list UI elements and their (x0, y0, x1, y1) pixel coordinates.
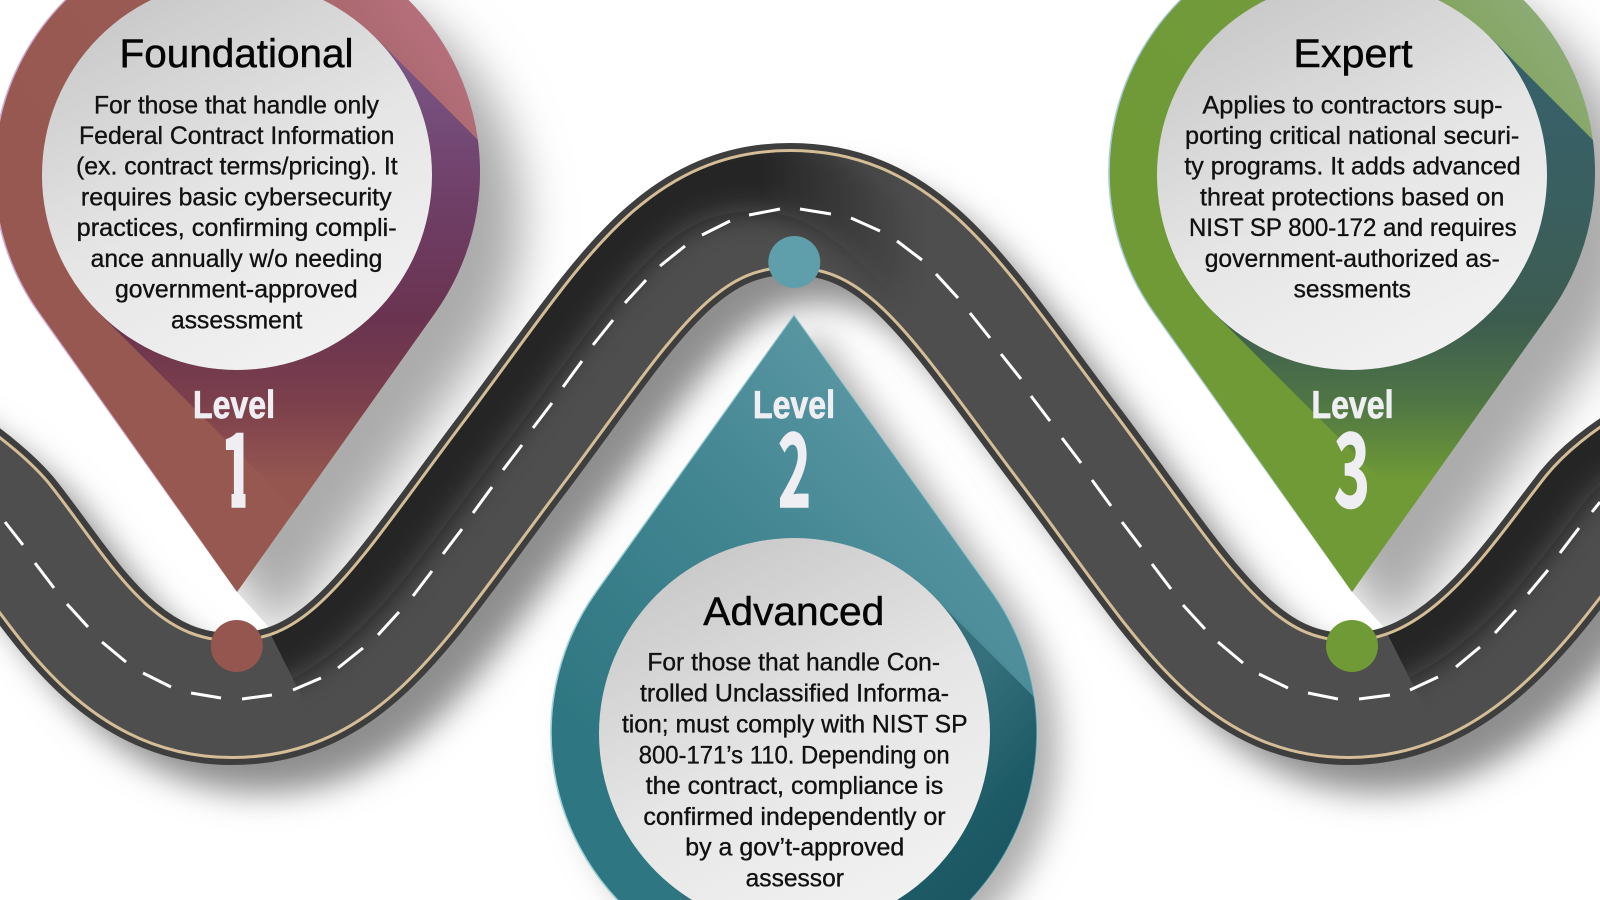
text block: level 1 description (76, 91, 398, 334)
road marker: level 2 (768, 236, 820, 288)
panel: level 3 pin (1109, 0, 1600, 638)
text block: level 3 description (1184, 91, 1521, 304)
pin 3 drop shadow (1352, 0, 1600, 627)
text block: level 3 description: threat protections based on (1200, 184, 1504, 212)
label: Level 3: 3 (1334, 390, 1370, 537)
text block: level 3 description: government-authorized as- (1205, 245, 1500, 273)
heading: Foundational: Foundational (120, 32, 354, 76)
label: Level 1: 1 (220, 390, 255, 537)
panel: level 1 pin (0, 0, 480, 592)
text block: level 2 description (622, 649, 968, 893)
text block: level 1 description: ance annually w/o needing (91, 245, 382, 273)
text block: level 1 description: For those that handle only (94, 91, 379, 119)
text block: level 1 description: practices, confirming compli- (77, 214, 397, 242)
text block: level 1 description: government-approved (115, 276, 358, 304)
text block: level 3 description: Applies to contractors sup- (1202, 91, 1503, 119)
text block: level 2 description: confirmed independently or (643, 803, 946, 831)
text block: level 2 description: tion; must comply with NIST SP (622, 710, 968, 738)
text block: level 3 description: ty programs. It adds advanced (1184, 153, 1521, 181)
pin 2 drop shadow (573, 329, 1059, 900)
label: Level 2: 2 (778, 390, 811, 537)
label: Level 3 (1312, 384, 1394, 537)
text block: level 3 description: porting critical national securi- (1185, 122, 1519, 150)
label: Level 3: Level (1312, 384, 1394, 427)
road marker: level 1 (211, 620, 263, 672)
label: Level 2 (753, 384, 835, 537)
text block: level 2 description: by a gov’t-approved (685, 834, 904, 862)
heading: Advanced: Advanced (703, 590, 884, 634)
road shading: first ascent (196, 171, 924, 661)
text block: level 2 description: the contract, compliance is (646, 772, 943, 800)
text block: level 3 description: sessments (1294, 276, 1411, 304)
text block: level 3 description: NIST SP 800-172 and requires (1189, 214, 1517, 242)
label: Level 2: Level (753, 384, 835, 427)
road drop shadow (0, 239, 1600, 729)
label: Level 1: Level (193, 384, 275, 427)
text block: level 1 description: requires basic cybersecurity (81, 184, 392, 212)
text block: level 1 description: (ex. contract terms/pricing). It (76, 153, 398, 181)
text block: level 1 description: assessment (171, 306, 302, 334)
panel: level 2 pin (550, 314, 1038, 900)
text block: level 1 description: Federal Contract Information (79, 122, 394, 150)
text block: level 2 description: assessor (746, 865, 844, 893)
label: Level 1 (194, 389, 274, 508)
text block: level 2 description: trolled Unclassified Informa- (640, 680, 949, 708)
pin 1 drop shadow (237, 0, 550, 627)
road shading: second ascent (1388, 429, 1600, 690)
winding road (0, 171, 1600, 699)
text block: level 2 description: For those that handle Con- (647, 649, 940, 677)
heading: Expert: Expert (1293, 32, 1413, 76)
road marker: level 3 (1326, 620, 1378, 672)
road centre dashes (5, 209, 1600, 699)
text block: level 2 description: 800-171’s 110. Depending on (639, 741, 950, 769)
